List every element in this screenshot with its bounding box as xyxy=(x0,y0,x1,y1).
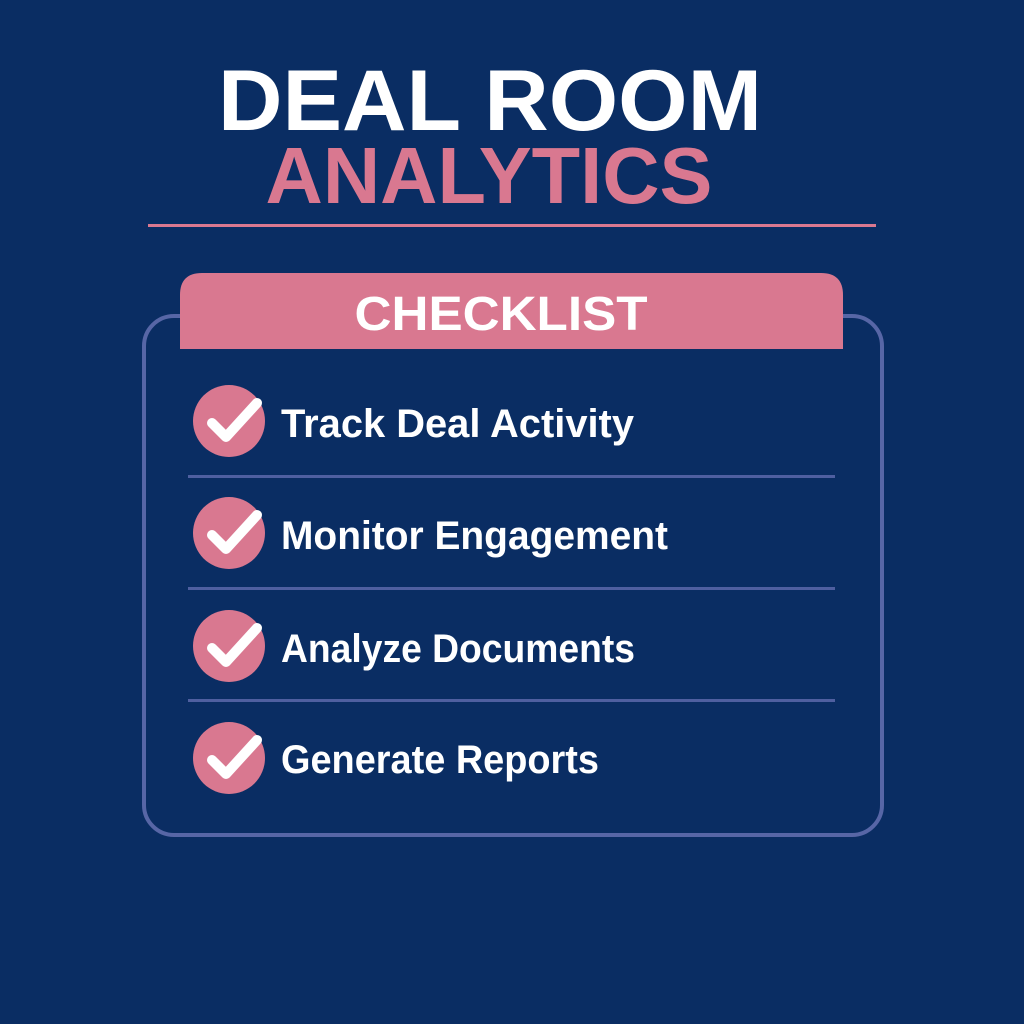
item: Analyze Documents: Analyze Documents xyxy=(281,627,635,671)
item: Generate Reports: Generate Reports xyxy=(281,738,599,782)
title xyxy=(218,53,762,220)
item: Analyze Documents xyxy=(193,610,635,682)
title: ANALYTICS xyxy=(266,131,712,220)
title: DEAL ROOM xyxy=(218,53,762,149)
item: Generate Reports xyxy=(193,722,599,794)
item: Track Deal Activity: Track Deal Activity xyxy=(281,402,635,446)
item: Monitor Engagement xyxy=(193,497,668,569)
item: Track Deal Activity xyxy=(193,385,635,457)
item: Monitor Engagement: Monitor Engagement xyxy=(281,514,668,558)
panel: checklist xyxy=(144,273,882,835)
header tab: CHECKLIST xyxy=(354,288,648,341)
header tab xyxy=(180,273,843,349)
title underline xyxy=(148,224,876,227)
